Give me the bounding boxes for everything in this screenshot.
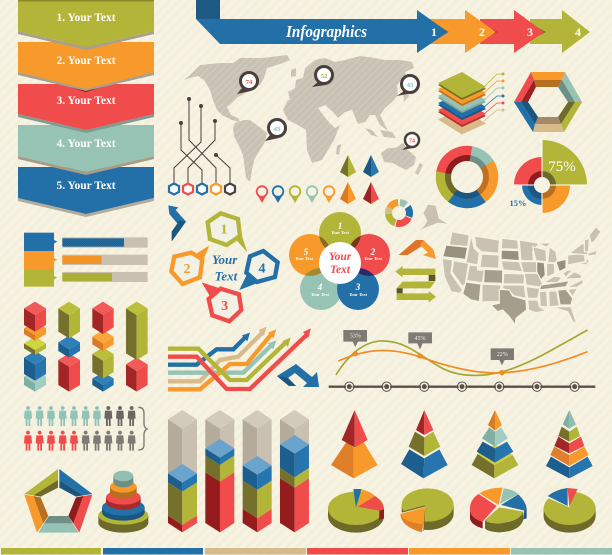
- chevron 1: 1. Your Text: [56, 12, 116, 24]
- petal labels: Your Text: [295, 256, 314, 261]
- callout 45%: [408, 332, 432, 349]
- pin 74 Australia: 74: [409, 138, 415, 144]
- panel: hexagon callouts: [168, 205, 278, 321]
- center text Your Text: Your: [212, 252, 238, 267]
- pyramids row: [331, 410, 593, 478]
- hexagon ring: [514, 72, 582, 132]
- line chart with callouts: [329, 330, 595, 391]
- panel: numbered chevron list: [18, 0, 154, 217]
- USA map: [416, 204, 601, 325]
- petal labels: 5: [304, 247, 309, 257]
- arrow numbers: 4: [575, 25, 581, 39]
- arrow: blue chevron under lines: [277, 364, 319, 387]
- banner: Infographics ribbon arrows: [196, 0, 590, 53]
- arrow numbers: 3: [527, 25, 533, 39]
- callout 45%: 45%: [414, 336, 425, 342]
- pin 43 Asia: [397, 76, 418, 96]
- pie 3: [470, 488, 527, 532]
- column 2: [58, 302, 80, 392]
- layered stack diagram: [438, 72, 504, 134]
- chevron 4: 4. Your Text: [56, 138, 116, 150]
- big isometric percentage bars: [168, 410, 309, 532]
- pyramid 3: [472, 410, 518, 478]
- pie 4: [543, 485, 596, 533]
- center text Your Text: Text: [215, 269, 238, 284]
- chevron 2: [18, 42, 154, 91]
- people pictogram: [24, 406, 148, 451]
- bottom color strip: [1, 548, 612, 554]
- arrow numbers: 2: [479, 25, 485, 39]
- chevron 2: 2. Your Text: [56, 55, 116, 67]
- pin 43 Asia: 43: [407, 82, 414, 89]
- bar 4: [280, 410, 309, 532]
- circuit lines with hexagon nodes: [169, 97, 235, 194]
- chevron 3: 3. Your Text: [56, 95, 116, 107]
- column 1: [24, 302, 46, 392]
- petal labels: Your Text: [349, 292, 368, 297]
- callout 22%: [491, 348, 514, 365]
- center text: Text: [330, 264, 351, 276]
- timeline: [329, 382, 595, 391]
- petal labels: Your Text: [331, 230, 350, 235]
- arrows: olive looping arrows: [395, 266, 436, 303]
- callout 2: 2: [183, 262, 190, 277]
- label 15%: 15%: [510, 198, 526, 208]
- pin 74 North America: 74: [246, 79, 253, 86]
- petal labels: [295, 221, 383, 297]
- chevron 5: [18, 167, 154, 217]
- callout 53%: [343, 330, 367, 347]
- callout 1: 1: [220, 223, 227, 238]
- progress bars: [24, 233, 148, 287]
- pin 74 Australia: [402, 133, 419, 150]
- pie charts row: [328, 485, 596, 533]
- bar row olive: [24, 269, 148, 287]
- arrow numbers: [431, 25, 581, 39]
- chevron 5: 5. Your Text: [56, 180, 116, 192]
- callout 3: 3: [221, 299, 228, 314]
- small pyramid icons: [340, 155, 379, 204]
- pin 43 South America: [265, 120, 286, 141]
- stacked disc tower: [98, 471, 148, 533]
- small segmented donut: [384, 198, 414, 228]
- donut chart: [430, 140, 504, 214]
- petal labels: 4: [317, 282, 323, 292]
- bar row orange: [24, 251, 148, 269]
- petal labels: Your Text: [364, 256, 383, 261]
- pin 52 Europe: 52: [321, 73, 327, 80]
- petal labels: 2: [370, 247, 376, 257]
- leader lines: [484, 74, 503, 121]
- isometric stacked columns: [24, 302, 148, 392]
- pyramid 2: [401, 410, 448, 478]
- pyramid 4: [546, 410, 593, 478]
- arrow numbers: 1: [431, 25, 437, 39]
- bar row blue: [24, 233, 148, 251]
- map pins with values: [237, 66, 419, 150]
- chevron 1: [18, 0, 154, 50]
- bar 1: [168, 410, 197, 532]
- callout 22%: 22%: [497, 352, 508, 358]
- chevron 4: [18, 125, 154, 175]
- column 4: [126, 302, 148, 392]
- crossing line arrows: [168, 327, 311, 389]
- banner title: Infographics: [285, 22, 367, 41]
- pie 2: [399, 488, 454, 533]
- panel: five circle petal diagram: [289, 212, 390, 310]
- pin 43 South America: 43: [274, 126, 281, 133]
- callout 4: 4: [258, 261, 265, 276]
- petal labels: Your Text: [311, 292, 330, 297]
- quarter pie chart 75% and 15%: [510, 140, 587, 213]
- pie 1: [328, 489, 384, 533]
- center text: Your: [329, 251, 352, 263]
- column 3: [92, 302, 114, 392]
- arrow: orange chevron: [399, 240, 436, 259]
- pyramid 1: [331, 410, 378, 478]
- petal labels: 3: [355, 282, 361, 292]
- label 75%: 75%: [548, 159, 576, 175]
- pentagon ring: [24, 469, 92, 533]
- pin 74 North America: [237, 72, 258, 94]
- petal labels: 1: [338, 221, 342, 231]
- world map: [184, 55, 423, 182]
- bar 3: [243, 410, 272, 532]
- pin 52 Europe: [312, 66, 332, 87]
- chevron 3: [18, 84, 154, 133]
- callout 53%: 53%: [350, 334, 361, 340]
- location markers row: [257, 186, 334, 203]
- arrow: blue chevron: [168, 205, 186, 242]
- bar 2: [205, 410, 234, 532]
